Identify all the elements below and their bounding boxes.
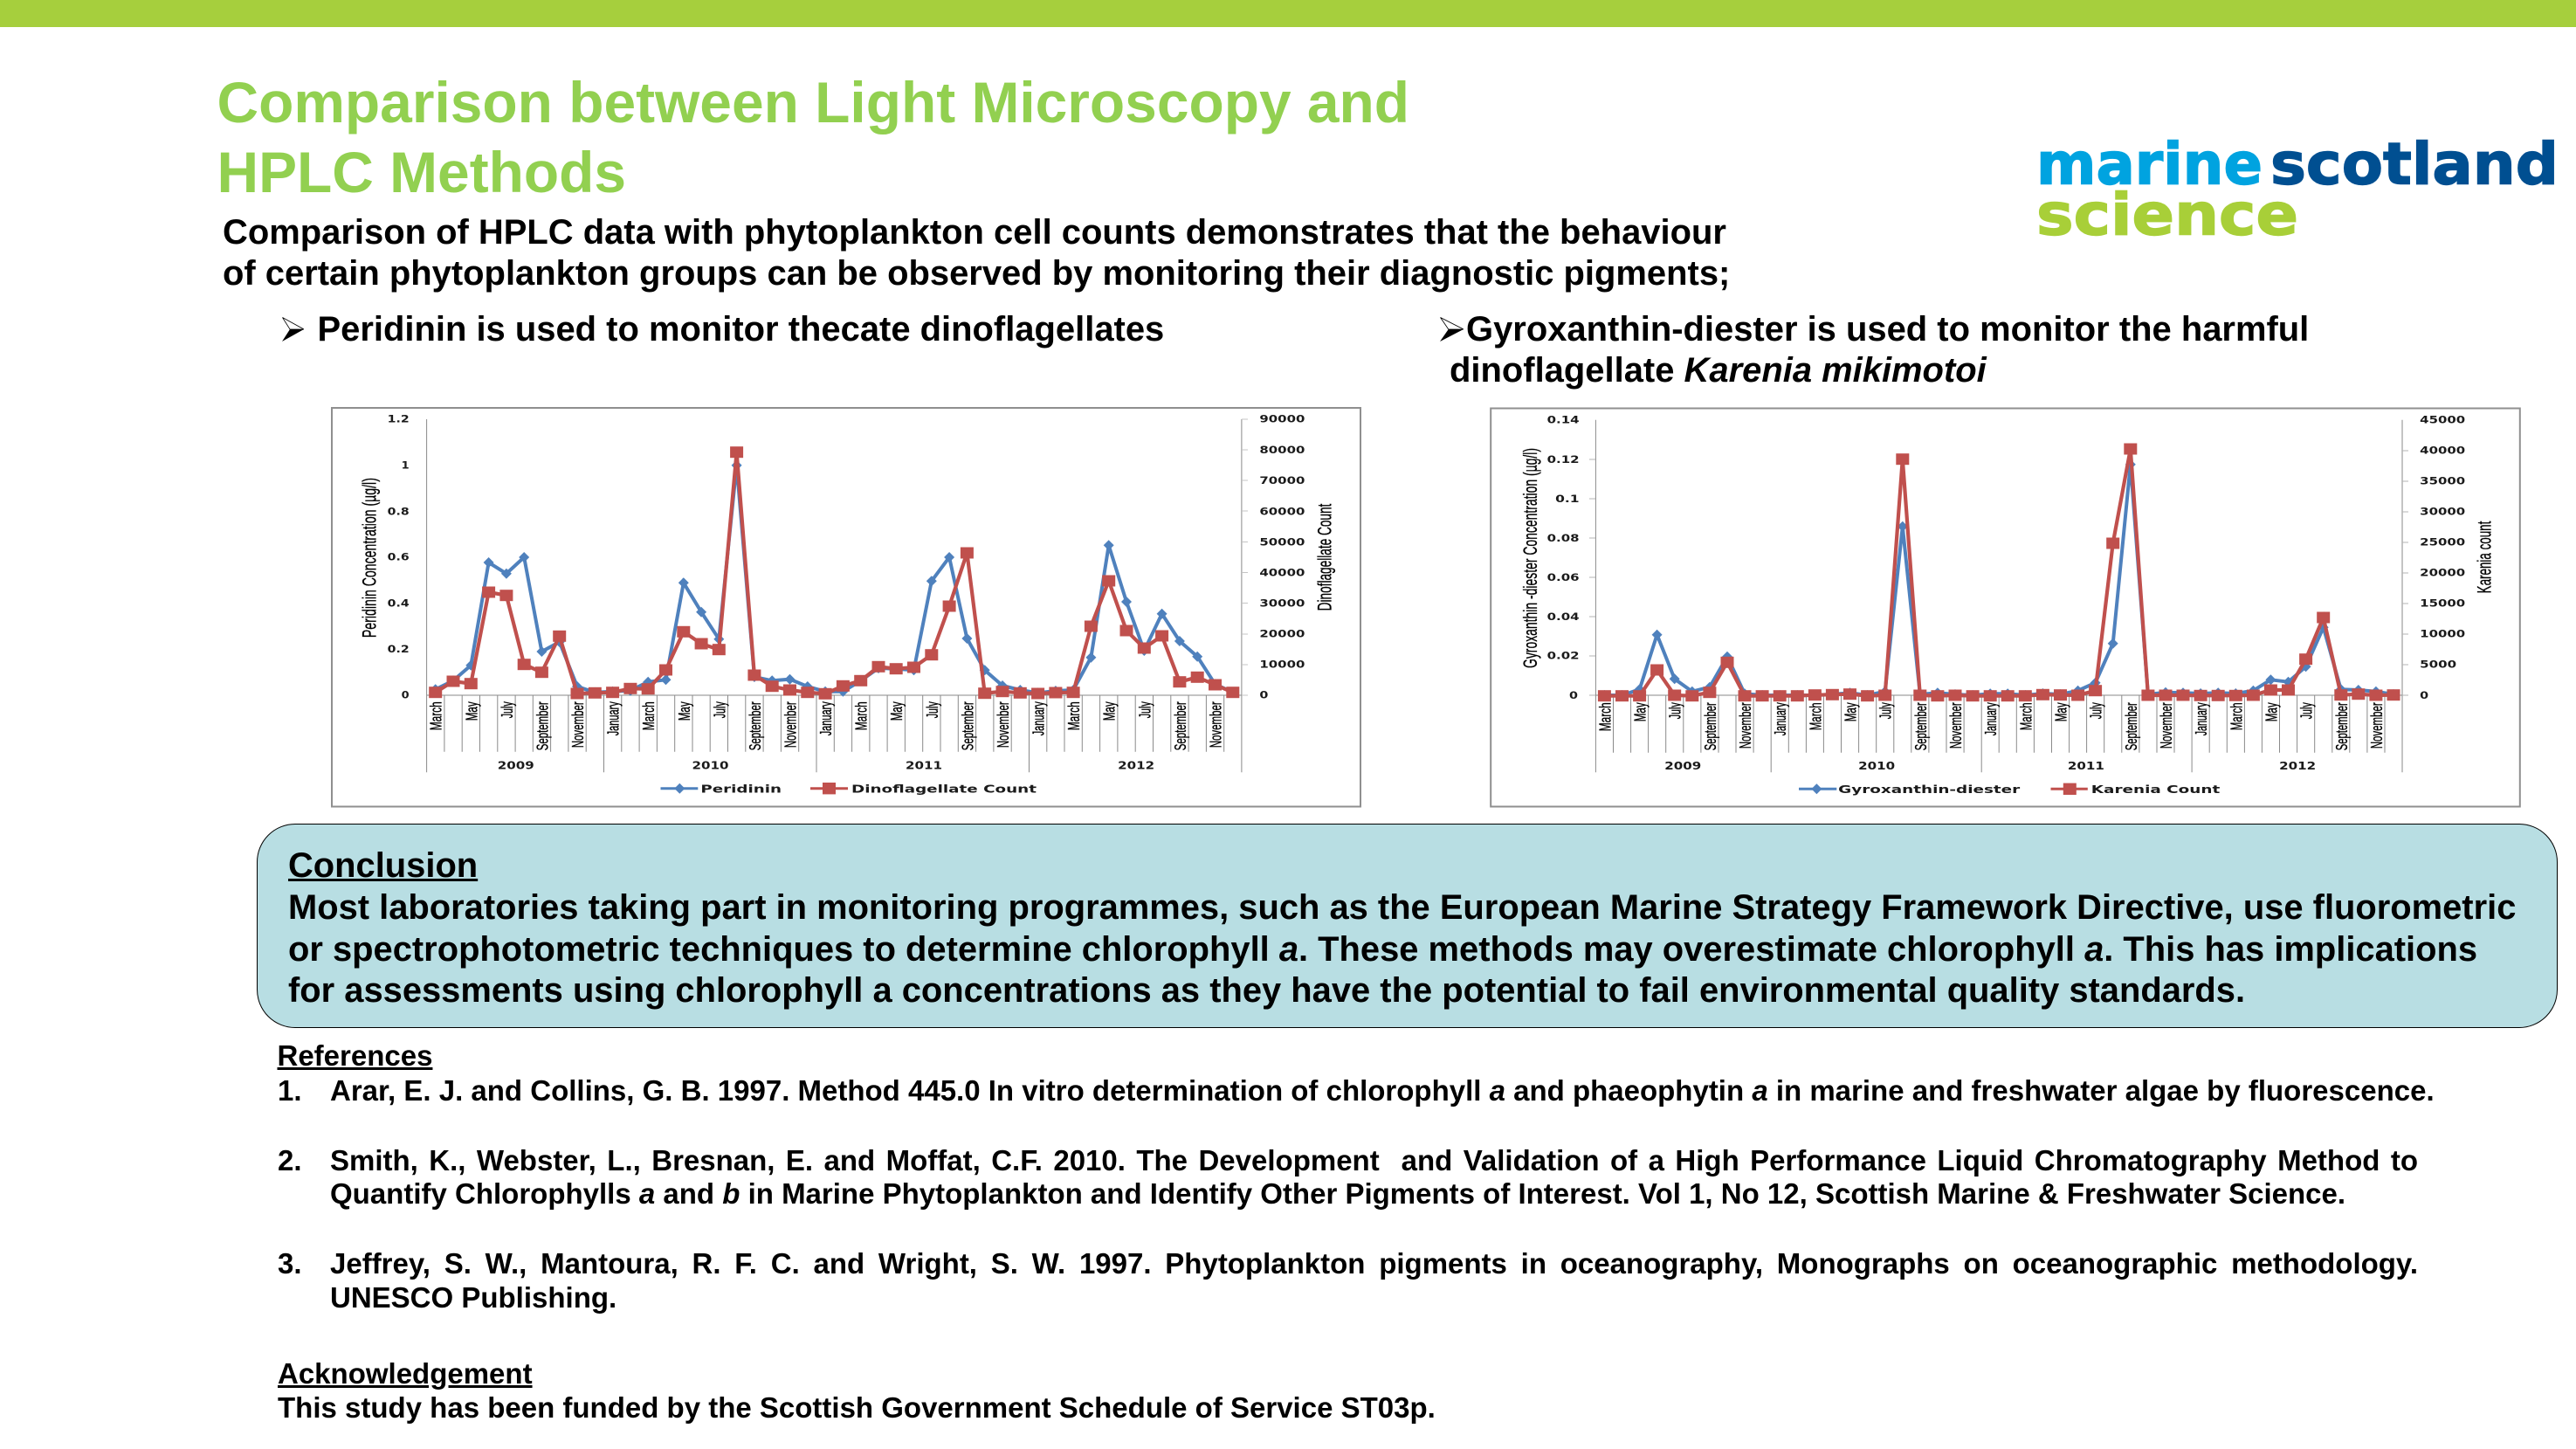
legend: Karenia Count — [2091, 783, 2220, 796]
title — [217, 70, 1409, 204]
legend — [1799, 783, 2220, 796]
left axis labels: 0.12 — [1547, 453, 1580, 466]
right axis labels: 90000 — [1259, 413, 1305, 425]
month labels: July — [499, 701, 516, 718]
year labels — [1664, 759, 2316, 772]
legend: Dinoflagellate Count — [851, 782, 1037, 795]
legend — [660, 782, 1037, 795]
month labels: September — [959, 701, 976, 750]
month labels: March — [428, 701, 445, 730]
acknowledgement text: This study has been funded by the Scottish Government Schedule of Service ST03p. — [278, 1391, 1436, 1424]
left axis labels: 0.6 — [388, 551, 410, 563]
month labels — [1596, 702, 2386, 750]
right axis labels: 0 — [2420, 689, 2428, 701]
month labels: January — [1982, 702, 2000, 735]
right axis labels: 25000 — [2420, 535, 2465, 548]
month labels: March — [1807, 702, 1824, 730]
conclusion text: Most laboratories taking part in monitoring programmes, such as the European Marine Strategy Framework Directive, use fluorometric — [288, 888, 2516, 927]
month labels: July — [2088, 702, 2105, 719]
month labels: January — [1030, 701, 1048, 735]
month labels: September — [747, 701, 764, 750]
legend: Gyroxanthin-diester — [1838, 783, 2021, 796]
month labels: November — [2368, 702, 2386, 749]
month labels: May — [1842, 702, 1860, 721]
year labels: 2010 — [1858, 759, 1896, 772]
right axis labels: 50000 — [1259, 535, 1305, 548]
month labels: July — [1877, 702, 1895, 719]
series: gyroxanthin-diester — [1604, 465, 2393, 695]
right axis labels: 5000 — [2420, 659, 2456, 671]
month labels: September — [534, 701, 551, 750]
month labels: November — [2158, 702, 2175, 749]
logo: marine scotland science — [2036, 131, 2559, 248]
left axis labels: 0.04 — [1547, 611, 1580, 623]
month labels: March — [2017, 702, 2035, 730]
month labels: September — [1172, 701, 1189, 750]
right axis labels — [2420, 414, 2465, 701]
panel: conclusion — [257, 824, 2558, 1028]
month labels: November — [569, 701, 587, 748]
month labels: November — [1947, 702, 1965, 749]
right axis labels: 40000 — [1259, 566, 1305, 578]
month labels: July — [711, 701, 728, 718]
legend: Peridinin — [700, 782, 782, 795]
left axis labels: 0.8 — [388, 505, 410, 517]
month labels: January — [605, 701, 623, 735]
month labels: November — [995, 701, 1012, 748]
right axis labels: 70000 — [1259, 474, 1305, 486]
left axis labels: 0.06 — [1547, 571, 1580, 583]
acknowledgement heading: Acknowledgement — [278, 1357, 533, 1390]
left axis labels: 1.2 — [388, 413, 410, 425]
reference 3: Jeffrey, S. W., Mantoura, R. F. C. and Wright, S. W. 1997. Phytoplankton pigments in oceanography, Monographs on oceanographic methodology. — [330, 1247, 2418, 1280]
month labels: March — [640, 701, 658, 730]
year labels: 2011 — [2068, 759, 2104, 772]
month labels — [428, 701, 1224, 750]
month labels: November — [782, 701, 800, 748]
month labels: May — [2263, 702, 2280, 721]
month labels: March — [1596, 702, 1614, 731]
left axis labels — [388, 413, 410, 700]
title: Comparison between Light Microscopy and — [217, 70, 1409, 135]
month labels: November — [1737, 702, 1754, 749]
logo: marine scotland science: scotland — [2270, 131, 2559, 198]
month labels: September — [1912, 702, 1930, 750]
reference 1: Arar, E. J. and Collins, G. B. 1997. Method 445.0 In vitro determination of chlorophyll a and phaeophytin a in marine and freshwater algae by fluorescence. — [330, 1074, 2435, 1107]
chart: gyroxanthin-diester vs karenia count — [1490, 407, 2521, 807]
conclusion text: Conclusion — [288, 846, 478, 885]
month labels: March — [2228, 702, 2245, 730]
month labels: July — [924, 701, 941, 718]
month labels: January — [817, 701, 835, 735]
right axis labels: 80000 — [1259, 444, 1305, 456]
reference 2: 2. — [278, 1144, 302, 1176]
right axis labels: 30000 — [1259, 597, 1305, 609]
right axis labels: 40000 — [2420, 445, 2465, 457]
intro paragraph: Comparison of HPLC data with phytoplankton cell counts demonstrates that the behaviour — [223, 213, 1726, 252]
left axis labels: 0.08 — [1547, 532, 1580, 544]
chart: peridinin vs dinoflagellate count — [331, 407, 1361, 807]
left axis labels: 0.4 — [388, 597, 410, 609]
reference 3 — [278, 1247, 2418, 1314]
right axis labels: 45000 — [2420, 414, 2465, 426]
year labels: 2011 — [906, 758, 942, 772]
month labels: September — [1702, 702, 1719, 750]
conclusion text: for assessments using chlorophyll a concentrations as they have the potential to fail environmental quality standards. — [288, 971, 2245, 1010]
reference 2 — [278, 1144, 2418, 1210]
bullet: gyroxanthin-diester: Gyroxanthin-diester is used to monitor the harmful — [1466, 310, 2309, 348]
right axis labels: 35000 — [2420, 474, 2465, 486]
month labels: March — [1065, 701, 1083, 730]
month labels: May — [463, 701, 480, 721]
right axis labels: 60000 — [1259, 505, 1305, 517]
year labels: 2009 — [1664, 759, 1701, 772]
month labels: January — [2193, 702, 2210, 735]
left axis labels: 0.1 — [1555, 493, 1580, 505]
left axis labels: 1 — [402, 459, 410, 472]
series: peridinin — [436, 466, 1233, 693]
logo: marine scotland science: science — [2036, 181, 2298, 248]
year labels — [498, 758, 1154, 772]
bullet: peridinin: Peridinin is used to monitor thecate dinoflagellates — [318, 310, 1164, 348]
year labels: 2009 — [498, 758, 534, 772]
reference 3: 3. — [278, 1247, 302, 1280]
month labels: May — [1632, 702, 1650, 721]
month labels: July — [1136, 701, 1154, 718]
left axis labels — [1547, 414, 1580, 701]
right axis labels: 10000 — [1259, 658, 1305, 670]
right axis labels: 0 — [1259, 688, 1268, 700]
conclusion text — [288, 846, 2516, 1010]
conclusion text: or spectrophotometric techniques to determine chlorophyll a. These methods may overestimate chlorophyll a. This has implications — [288, 930, 2477, 969]
reference 3: UNESCO Publishing. — [330, 1281, 616, 1314]
month labels: July — [1667, 702, 1684, 719]
left axis labels: 0.14 — [1547, 414, 1580, 426]
references heading: References — [278, 1039, 432, 1072]
right axis labels: 20000 — [1259, 627, 1305, 639]
reference 2: Quantify Chlorophylls a and b in Marine Phytoplankton and Identify Other Pigments of Interest. Vol 1, No 12, Scottish Marine & Freshwater Science. — [330, 1177, 2345, 1210]
left axis labels: 0 — [1569, 689, 1578, 701]
left axis labels: 0.2 — [388, 643, 410, 655]
intro paragraph — [223, 213, 1730, 293]
icon: bullet arrow right — [1440, 317, 1464, 342]
right axis labels: 15000 — [2420, 597, 2465, 610]
left axis labels: 0.02 — [1547, 650, 1580, 662]
intro paragraph: of certain phytoplankton groups can be observed by monitoring their diagnostic pigments; — [223, 254, 1730, 293]
icon: bullet arrow left — [282, 317, 304, 342]
left axis labels: 0 — [402, 688, 410, 700]
year labels: 2012 — [2279, 759, 2316, 772]
right axis title: Karenia count — [2473, 521, 2495, 593]
right axis labels: 20000 — [2420, 567, 2465, 579]
right axis labels — [1259, 413, 1305, 700]
month labels: May — [676, 701, 693, 721]
series: dinoflagellate count — [436, 452, 1233, 693]
title: HPLC Methods — [217, 140, 626, 204]
month labels: September — [2123, 702, 2140, 750]
month labels: July — [2298, 702, 2316, 719]
year labels: 2010 — [692, 758, 729, 772]
month labels: September — [2333, 702, 2351, 750]
month labels: May — [888, 701, 906, 721]
right axis title: Dinoflagellate Count — [1314, 504, 1336, 611]
logo: marine scotland science: marine — [2036, 131, 2263, 198]
reference 1: 1. — [278, 1074, 302, 1107]
month labels: January — [1772, 702, 1789, 735]
month labels: May — [1101, 701, 1119, 721]
right axis labels: 30000 — [2420, 506, 2465, 518]
series: karenia count — [1604, 449, 2393, 696]
year labels: 2012 — [1118, 758, 1154, 772]
right axis labels: 10000 — [2420, 628, 2465, 640]
month labels: May — [2052, 702, 2070, 721]
bullet: gyroxanthin-diester — [1450, 310, 2309, 390]
month labels: November — [1207, 701, 1224, 748]
bullet: gyroxanthin-diester: dinoflagellate Karenia mikimotoi — [1450, 351, 1987, 390]
month labels: March — [853, 701, 871, 730]
top green bar — [0, 0, 2576, 27]
reference 2: Smith, K., Webster, L., Bresnan, E. and Moffat, C.F. 2010. The Development and Validation of a High Performance Liquid Chromatography Method to — [330, 1144, 2418, 1176]
